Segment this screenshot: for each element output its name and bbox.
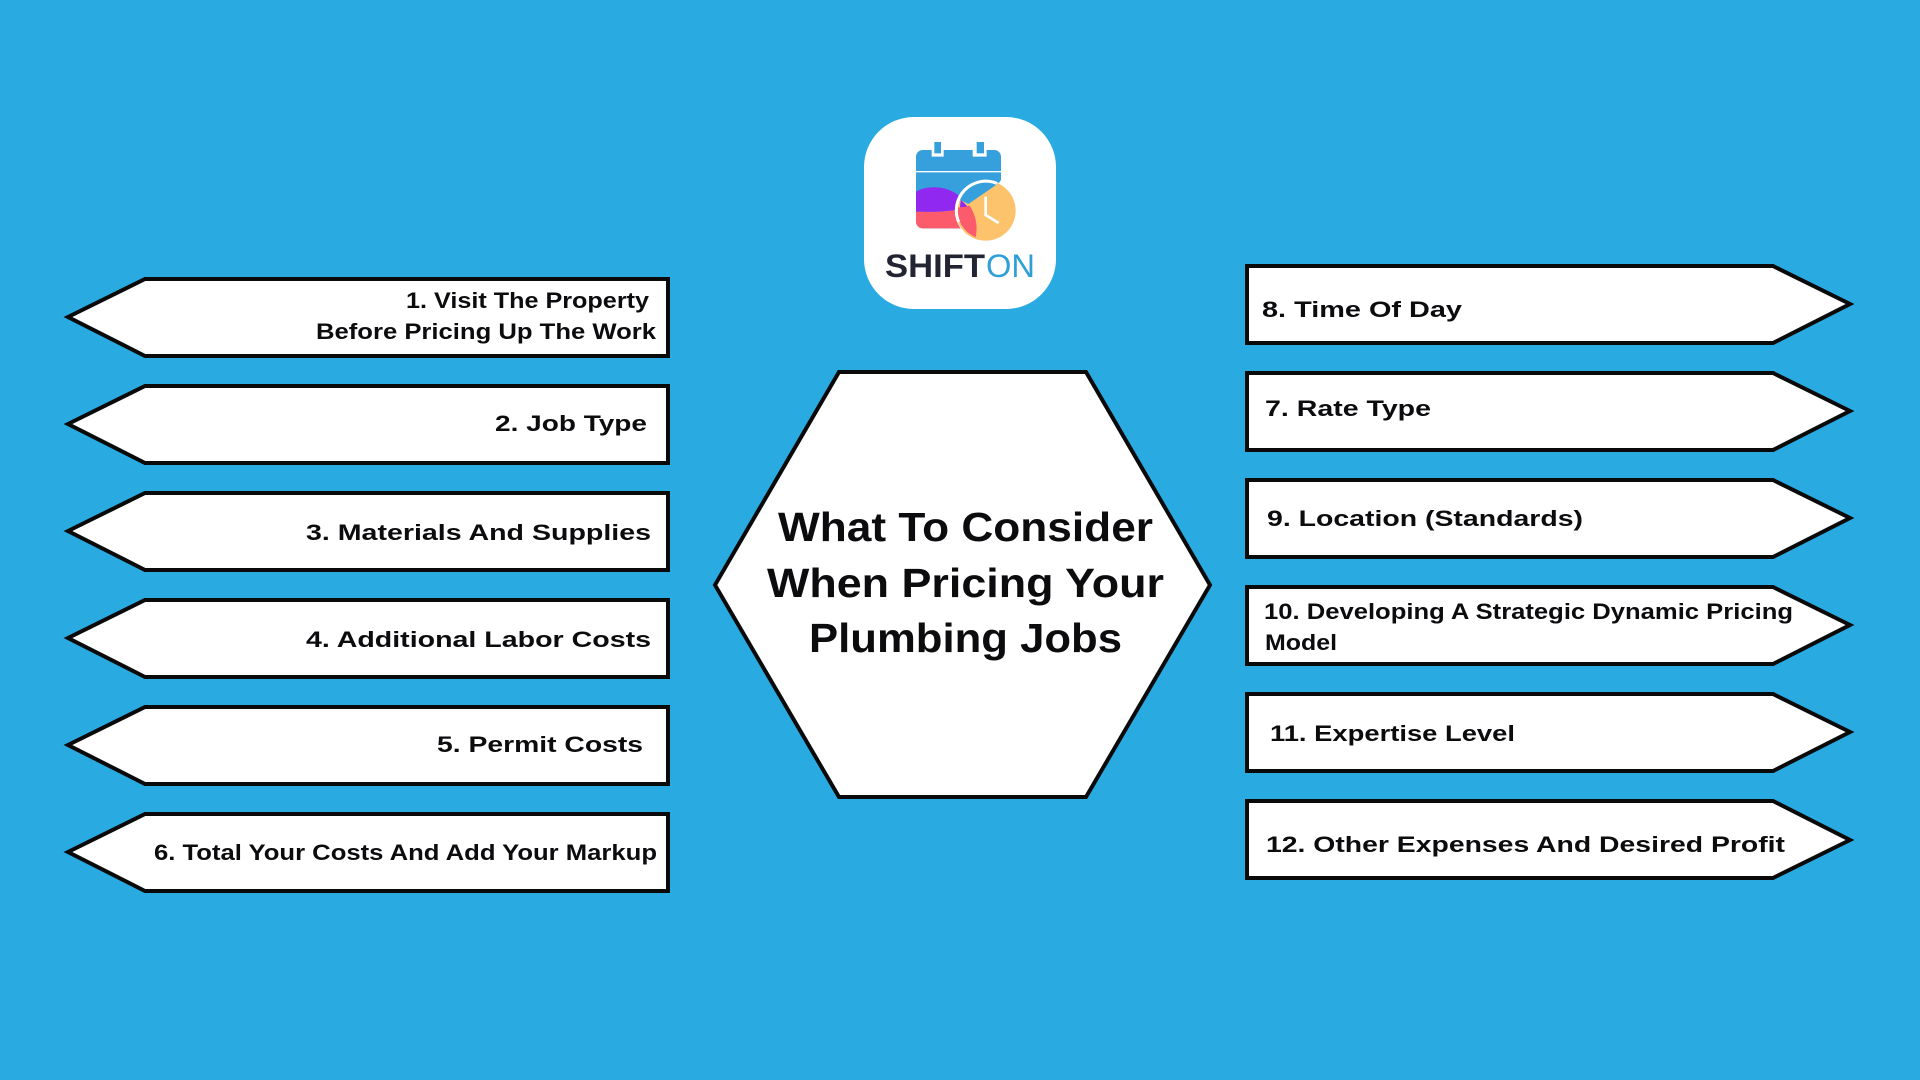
right arrow 11: 11. Expertise Level	[1270, 721, 1515, 746]
left arrow 1: Before Pricing Up The Work	[316, 319, 657, 344]
title: Plumbing Jobs	[809, 615, 1122, 661]
right arrow 10	[1247, 587, 1850, 664]
logo: Shifton app icon	[864, 117, 1056, 309]
right arrow 12	[1247, 801, 1850, 878]
left arrow 5	[68, 707, 668, 784]
right arrow 11	[1247, 694, 1850, 771]
right arrow 9: 9. Location (Standards)	[1267, 506, 1583, 531]
logo wordmark: SHIFT	[885, 248, 985, 284]
left arrow 1: 1. Visit The Property	[406, 288, 650, 313]
right arrow 9	[1247, 480, 1850, 557]
left arrow 1	[68, 279, 668, 356]
left arrow 6	[68, 814, 668, 891]
right arrow 7: 7. Rate Type	[1265, 396, 1431, 421]
right arrow 12: 12. Other Expenses And Desired Profit	[1266, 832, 1786, 857]
title	[767, 504, 1164, 661]
left arrow 2	[68, 386, 668, 463]
left arrow 3: 3. Materials And Supplies	[306, 520, 651, 545]
right arrow 8	[1247, 266, 1850, 343]
left arrow 2: 2. Job Type	[495, 411, 647, 436]
logo wordmark: ON	[986, 248, 1035, 284]
right arrow 8: 8. Time Of Day	[1262, 297, 1463, 322]
title: What To Consider	[778, 504, 1153, 550]
right arrow 7	[1247, 373, 1850, 450]
title: When Pricing Your	[767, 560, 1164, 606]
left arrow 6: 6. Total Your Costs And Add Your Markup	[154, 840, 657, 865]
logo wordmark	[885, 248, 1035, 284]
right arrow 10: 10. Developing A Strategic Dynamic Pricing	[1264, 599, 1793, 624]
left arrow 3	[68, 493, 668, 570]
left arrow 4: 4. Additional Labor Costs	[306, 627, 651, 652]
icon: calendar and clock	[916, 142, 1016, 241]
right arrow 10: Model	[1265, 630, 1337, 655]
left arrow 4	[68, 600, 668, 677]
left arrow 5: 5. Permit Costs	[437, 732, 643, 757]
central hexagon with title	[715, 372, 1210, 797]
